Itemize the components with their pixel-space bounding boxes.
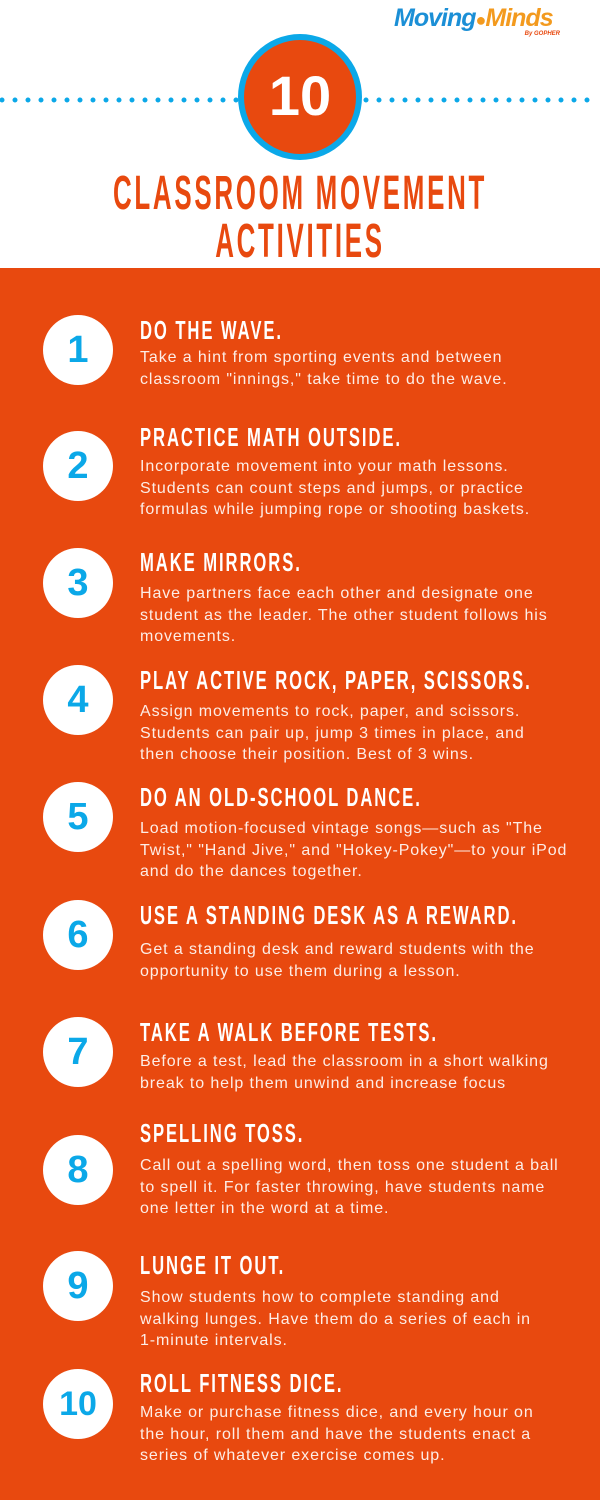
logo: By GOPHER — [525, 31, 560, 37]
item 5 — [43, 782, 567, 880]
item 10 — [43, 1368, 534, 1464]
item 4 — [43, 665, 532, 763]
item 3 — [43, 547, 548, 645]
item 10: ROLL FITNESS DICE. — [140, 1368, 343, 1398]
item 6: 6 — [67, 914, 89, 956]
item 9: 9 — [67, 1265, 89, 1307]
item 4: Assign movements to rock, paper, and scissors. Students can pair up, jump 3 times in place, and then choose their position. Best of 3 wins. — [140, 703, 525, 763]
item 8 — [43, 1118, 559, 1217]
item 7 — [43, 1017, 549, 1092]
item 7: TAKE A WALK BEFORE TESTS. — [140, 1017, 438, 1047]
item 8: SPELLING TOSS. — [140, 1118, 304, 1148]
item 4: PLAY ACTIVE ROCK, PAPER, SCISSORS. — [140, 665, 532, 695]
item 2: Incorporate movement into your math lessons. Students can count steps and jumps, or practice formulas while jumping rope or shooting baskets. — [140, 458, 530, 518]
item 1: Take a hint from sporting events and between classroom "innings," take time to do the wave. — [140, 349, 508, 388]
dotted line — [0, 98, 590, 102]
item 2 — [43, 422, 530, 518]
item 8: Call out a spelling word, then toss one student a ball to spell it. For faster throwing, have students name one letter in the word at a time. — [140, 1157, 559, 1217]
header badge: 10 — [238, 34, 362, 160]
item 2: 2 — [67, 445, 89, 487]
item 1 — [43, 315, 508, 388]
item 5: DO AN OLD-SCHOOL DANCE. — [140, 782, 422, 812]
title: ACTIVITIES — [215, 215, 385, 268]
item 1: 1 — [67, 329, 89, 371]
title — [113, 167, 487, 268]
item 7: Before a test, lead the classroom in a short walking break to help them unwind and increase focus — [140, 1053, 549, 1092]
item 9: Show students how to complete standing and walking lunges. Have them do a series of each in 1-minute intervals. — [140, 1289, 531, 1349]
item 10: 10 — [59, 1385, 97, 1423]
logo: Moving●Minds — [394, 4, 553, 32]
item 6: Get a standing desk and reward students with the opportunity to use them during a lesson. — [140, 941, 535, 980]
item 9: LUNGE IT OUT. — [140, 1250, 285, 1280]
item 1: DO THE WAVE. — [140, 315, 283, 345]
item 9 — [43, 1250, 531, 1349]
item 10: Make or purchase fitness dice, and every hour on the hour, roll them and have the students enact a series of whatever exercise comes up. — [140, 1404, 534, 1464]
header badge: 10: 10 — [269, 64, 331, 127]
item 3: MAKE MIRRORS. — [140, 547, 302, 577]
item 6: USE A STANDING DESK AS A REWARD. — [140, 900, 518, 930]
item 5: 5 — [67, 796, 89, 838]
item 3: Have partners face each other and designate one student as the leader. The other student follows his movements. — [140, 585, 548, 645]
item 8: 8 — [67, 1149, 89, 1191]
item 4: 4 — [67, 679, 89, 721]
item 2: PRACTICE MATH OUTSIDE. — [140, 422, 402, 452]
title: CLASSROOM MOVEMENT — [113, 167, 487, 220]
item 6 — [43, 900, 535, 980]
item 3: 3 — [67, 562, 89, 604]
item 5: Load motion-focused vintage songs—such as "The Twist," "Hand Jive," and "Hokey-Pokey"—to your iPod and do the dances together. — [140, 820, 567, 880]
item 7: 7 — [67, 1031, 89, 1073]
